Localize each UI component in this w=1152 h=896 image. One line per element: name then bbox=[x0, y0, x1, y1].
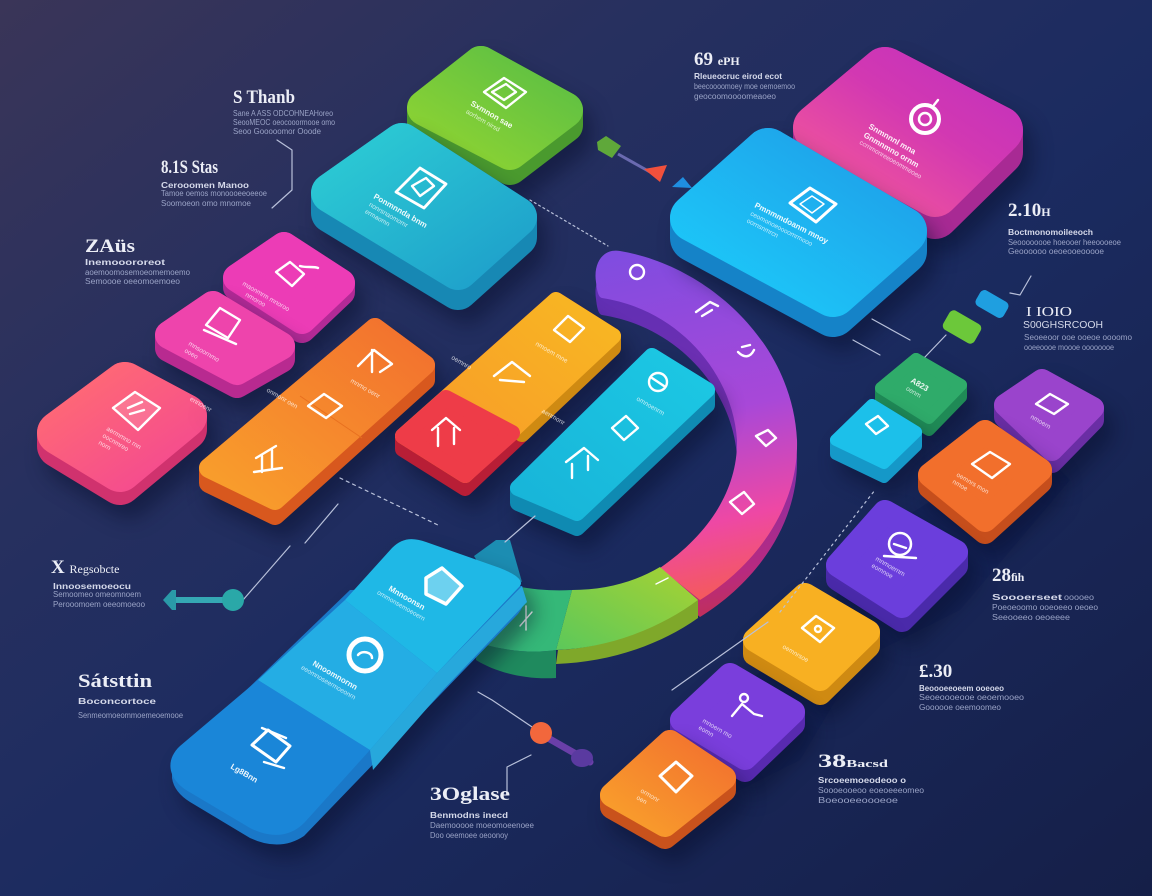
label: right 2.30: £.30 bbox=[919, 661, 952, 682]
label: right 2.10 bbox=[1008, 200, 1122, 256]
label: right 1010 bbox=[1023, 305, 1133, 352]
icon: purple right bbox=[1036, 394, 1068, 414]
panel: pink block bbox=[817, 71, 999, 215]
label: right 2.10: Seoooooooe hoeooer heeoooeoe bbox=[1008, 238, 1122, 247]
text: yellow strip: oemnro bbox=[450, 354, 473, 372]
label: top left: Seoo Gooooomor Ooode bbox=[233, 127, 322, 136]
label: right 28 bbox=[992, 565, 1099, 622]
text: magenta upper: maonmrm mnoroo bbox=[241, 281, 291, 313]
label: left fourth: Semoomeo omeomnoem bbox=[53, 590, 141, 599]
text: coral block bbox=[97, 426, 142, 465]
label: left third bbox=[85, 236, 191, 286]
icon: bottom robot bbox=[252, 728, 290, 768]
label: right 2.30: Goooooe oeemoomeo bbox=[919, 703, 1002, 712]
divider: orange strip bbox=[300, 396, 362, 438]
label: left second: Cerooomen Manoo bbox=[161, 180, 249, 190]
label: bottom right: Soooeooeoo eoeoeeeomeo bbox=[818, 786, 925, 795]
label: top right: Rleueocruc eirod ecot bbox=[694, 71, 782, 81]
icon: orange 1 bbox=[358, 350, 392, 372]
label: right 1010: S00GHSRCOOH bbox=[1023, 320, 1103, 331]
arc icon 5 bbox=[730, 492, 754, 514]
text: magenta lower bbox=[183, 341, 221, 371]
icon: cyan 3 bbox=[566, 448, 598, 478]
icon: green block bbox=[484, 78, 526, 108]
panel: orange block bottom bbox=[612, 742, 724, 837]
label: left fourth: Innoosemoeocu bbox=[53, 581, 131, 591]
text: magenta lower: mnsoornmo bbox=[187, 341, 221, 364]
label: left fifth: Sátsttin bbox=[78, 671, 153, 692]
label: left fifth: Senmeomoeommoemeoemooe bbox=[78, 711, 184, 720]
panel: small cyan block bbox=[836, 405, 916, 477]
label: right 2.30: Seoeoooeooe oeoemooeo bbox=[919, 693, 1025, 702]
text: middle: Nnoomnornn bbox=[311, 659, 359, 692]
panel: magenta block upper bbox=[237, 246, 341, 329]
label: right 1010: ooeeoooe moooe oooooooe bbox=[1024, 343, 1114, 352]
text: magenta upper: nmoroo bbox=[244, 292, 267, 309]
text: magenta lower: ooeo bbox=[183, 348, 199, 361]
text: violet block bbox=[870, 556, 906, 585]
arc icon 3 bbox=[738, 345, 754, 356]
label: left fifth: Boconcortoce bbox=[78, 696, 156, 706]
strip side bbox=[403, 300, 613, 488]
icon: red bbox=[432, 418, 460, 446]
icon: yellow 2 bbox=[494, 362, 530, 382]
icon: magenta upper bbox=[276, 262, 318, 286]
label: top right: beecoooomoey moe oemoemoo bbox=[694, 82, 795, 91]
label: left fifth bbox=[78, 671, 184, 720]
label: right 1010: I IOIO bbox=[1026, 305, 1072, 320]
label: left second: Soomoeon omo mnomoe bbox=[161, 199, 252, 208]
label: bottom centre: Doo oeemoee oeoonoy bbox=[430, 831, 508, 840]
arc icon 1 bbox=[630, 265, 644, 279]
text: middle: eeomnoseermoeonrn bbox=[300, 664, 357, 702]
text: orange right: oemnrs mon bbox=[955, 472, 990, 496]
text: orange strip: mnmo oenr bbox=[349, 378, 382, 401]
panel: small green block bbox=[881, 359, 961, 430]
label: bottom centre: Daemooooe moeomoeenoee bbox=[430, 821, 535, 830]
text: teal block: nonrsnaomomr bbox=[368, 201, 410, 230]
text: orange strip: onmonr oen bbox=[265, 387, 299, 411]
label: bottom centre: 3Oglase bbox=[430, 784, 510, 805]
arc icons bbox=[520, 265, 776, 630]
label: top right bbox=[694, 49, 795, 101]
panel: teal connector cone bbox=[474, 540, 522, 582]
icon: cyan 2 bbox=[612, 416, 638, 440]
icon: monitor bbox=[790, 188, 836, 222]
segment: wall lighter bbox=[370, 586, 527, 770]
icon: teal connector bbox=[163, 589, 244, 611]
panel: coral block bbox=[59, 384, 185, 483]
arc lime segment bbox=[556, 567, 698, 650]
panel: right column base strip bbox=[620, 440, 1070, 830]
label: right 28: 28ﬁh bbox=[992, 565, 1025, 586]
label: left second bbox=[161, 157, 268, 208]
label: right 28: ooooeo bbox=[1064, 593, 1095, 602]
panel: purple block bottom bbox=[682, 675, 793, 770]
arc side wall bbox=[596, 268, 797, 617]
arc green segment bbox=[476, 586, 572, 652]
panel: yellow block right bbox=[755, 595, 868, 693]
text: purple bottom: eomn bbox=[697, 725, 715, 739]
text: top seal: ommonsemoeoern bbox=[376, 589, 426, 623]
label: bottom centre: Benmodns inecd bbox=[430, 810, 508, 820]
text: cyan strip: omnoenrm bbox=[635, 396, 665, 417]
label: left third: Inemooororeot bbox=[85, 257, 165, 267]
text: orange strip bbox=[188, 313, 382, 484]
label: left third: Semoooe oeeomoemoeo bbox=[85, 277, 181, 286]
arc icon 4 bbox=[756, 430, 776, 446]
icon: orange and purple node bbox=[530, 722, 593, 767]
icon: top seal bbox=[426, 568, 462, 604]
icon: seated person bbox=[732, 694, 762, 716]
label: top left bbox=[233, 87, 335, 136]
icon: cyan 1 bbox=[649, 373, 667, 391]
label: left second: 8.1S Stas bbox=[161, 157, 218, 178]
arc lime segment side bbox=[556, 600, 698, 664]
text: yellow strip: nmoem mne bbox=[534, 341, 569, 365]
label: bottom centre bbox=[430, 784, 535, 840]
panel: yellow and red strip bbox=[403, 300, 613, 488]
text: purple bottom: mnoern mo bbox=[701, 718, 733, 740]
label: left third: aoemoomosemoeomemoemo bbox=[85, 268, 191, 277]
text: cyan strip bbox=[540, 358, 665, 468]
text: yellow strip bbox=[450, 308, 569, 412]
icon: yellow right bbox=[802, 616, 834, 642]
panel: curved arc progress band bbox=[476, 251, 797, 678]
label: right 2.10: 2.10H bbox=[1008, 200, 1051, 221]
text: pink block: Gnmnmno ornm bbox=[862, 131, 920, 170]
yellow top bbox=[403, 300, 613, 475]
label: bottom right: 38 Bacsd bbox=[818, 751, 888, 772]
red top bbox=[403, 398, 512, 475]
label: left third: ZAüs bbox=[85, 236, 135, 257]
label: top right: 69 ePH bbox=[694, 49, 740, 70]
panel: cyan strip bbox=[518, 356, 707, 528]
panel: green block top bbox=[425, 64, 565, 167]
text: purple right: nmoern bbox=[1029, 414, 1052, 431]
text: violet block: mnmoernm bbox=[874, 556, 906, 578]
segment: top teal bbox=[345, 539, 521, 673]
arc icon 6 bbox=[520, 606, 532, 630]
text: pink block: ccrnmonreeoenmmeoeo bbox=[858, 139, 923, 181]
callout lines bbox=[243, 140, 1031, 795]
label: top left: SeooMEOC oeocooormooe omo bbox=[233, 118, 335, 127]
text: teal block: ermaomn bbox=[364, 208, 391, 228]
yellow side bbox=[522, 336, 613, 434]
label: left second: Tamoe oemos monoooeeoeeoe bbox=[161, 189, 268, 198]
text: orange bottom bbox=[635, 788, 661, 811]
icon: yellow 1 bbox=[554, 316, 584, 342]
text: orange bottom: ormonr bbox=[639, 788, 661, 804]
icon: orange bottom bbox=[660, 762, 692, 792]
panel: orange block right bbox=[930, 432, 1040, 532]
label: left fourth: Perooomoem oeeomoeoo bbox=[53, 600, 146, 609]
icon: orange right bbox=[972, 452, 1010, 478]
text: small green block: oenm bbox=[904, 385, 922, 400]
text: small green block bbox=[904, 376, 931, 401]
text: blue block: Pmnmmdoanm mnoy bbox=[753, 201, 830, 246]
icon: note card bbox=[113, 392, 160, 430]
text: pink block bbox=[858, 122, 933, 181]
text: bottom: Lg8Bnn bbox=[229, 762, 259, 785]
text: blue block: ceomonoeoooomrmooo bbox=[749, 211, 814, 248]
label: bottom right: Srcoeemoeodeoo o bbox=[818, 775, 906, 785]
icon: laptop bbox=[204, 308, 240, 344]
text: purple bottom bbox=[697, 718, 733, 747]
text: violet block: eomnoe bbox=[870, 563, 894, 581]
text: top seal: Mnnoonsn bbox=[387, 584, 427, 612]
text: blue block bbox=[745, 201, 830, 261]
label: right 28: Poeoeoomo ooeoeeo oeoeo bbox=[992, 603, 1099, 612]
icon: violet badge bbox=[884, 533, 916, 558]
label: left fourth bbox=[51, 557, 146, 609]
label: right 28: Soooerseet bbox=[992, 592, 1062, 602]
block side wall bbox=[172, 586, 524, 845]
text: green block: aorhem nirsd bbox=[464, 108, 501, 134]
icon: green pill connector bbox=[941, 308, 983, 346]
label: right 2.10: Geoooooo oeoeooeooooe bbox=[1008, 247, 1105, 256]
icon: round badge bbox=[911, 100, 939, 133]
arc green segment side bbox=[476, 642, 556, 678]
text: yellow right: oemnrsoe bbox=[781, 644, 810, 664]
text: teal block: Ponmnnda bnm bbox=[372, 192, 429, 230]
label: top left: S Thanb bbox=[233, 87, 295, 108]
panel: teal block bbox=[331, 143, 517, 290]
arc icon 2 bbox=[696, 302, 718, 316]
icon: blue pill connector bbox=[974, 288, 1010, 320]
text: orange strip: ennoenr bbox=[188, 396, 213, 414]
arc top surface bbox=[596, 251, 797, 600]
text: orange right: nmoe bbox=[951, 479, 969, 493]
label: top left: Sane A ASS ODCOHNEAHoreo bbox=[233, 109, 333, 118]
panel: orange strip bbox=[188, 313, 425, 515]
text: coral block: oocnmreo bbox=[101, 433, 130, 453]
label: right 28: Seeooeeo oeoeeee bbox=[992, 613, 1071, 622]
label: bottom right bbox=[818, 751, 925, 805]
label: right 2.30 bbox=[919, 661, 1025, 712]
segment: dark blue bottom bbox=[170, 680, 370, 835]
icon: middle circle bbox=[349, 639, 381, 671]
text: pink block: Snmnnnl mna bbox=[867, 122, 918, 156]
text: green block: Sxmnon sae bbox=[469, 99, 515, 131]
icon: orange 2 bbox=[308, 394, 342, 418]
icon: small cyan bbox=[866, 416, 888, 434]
panel: purple block right bbox=[1005, 380, 1093, 462]
panel: long blue block bbox=[170, 539, 527, 845]
segment: middle teal bbox=[258, 600, 437, 750]
text: coral block: aermmno rnn bbox=[105, 426, 142, 451]
icon: orange 3 bbox=[254, 446, 282, 472]
text: small green block: A823 bbox=[909, 376, 931, 394]
label: right 2.30: Beoooeeoeem ooeoeo bbox=[919, 683, 1004, 693]
label: bottom right: Boeooeeoooeoe bbox=[818, 796, 899, 805]
panel: violet block bbox=[838, 512, 956, 620]
label: top right: geocoomoooomeaoeo bbox=[694, 92, 777, 101]
label: left fourth: X Regsobcte bbox=[51, 557, 119, 578]
text: orange bottom: oen bbox=[635, 795, 648, 806]
text: cyan strip: aenmonr bbox=[540, 408, 567, 427]
label: right 2.10: Boctmonomoileeoch bbox=[1008, 227, 1093, 237]
panel: magenta block lower bbox=[169, 305, 281, 384]
text: coral block: norn bbox=[97, 440, 112, 452]
text: orange right bbox=[951, 472, 990, 503]
text: blue block: oornsnmrcn bbox=[745, 218, 779, 240]
label: right 1010: Seoeeoor ooe ooeoe oooomo bbox=[1024, 333, 1133, 342]
panel: blue block bbox=[694, 152, 903, 313]
text: top seal bbox=[376, 580, 432, 623]
icon: house bbox=[396, 168, 446, 208]
arrow: top green connector bbox=[597, 136, 692, 188]
arc icon 7 bbox=[656, 578, 668, 584]
text: teal block bbox=[364, 192, 429, 245]
